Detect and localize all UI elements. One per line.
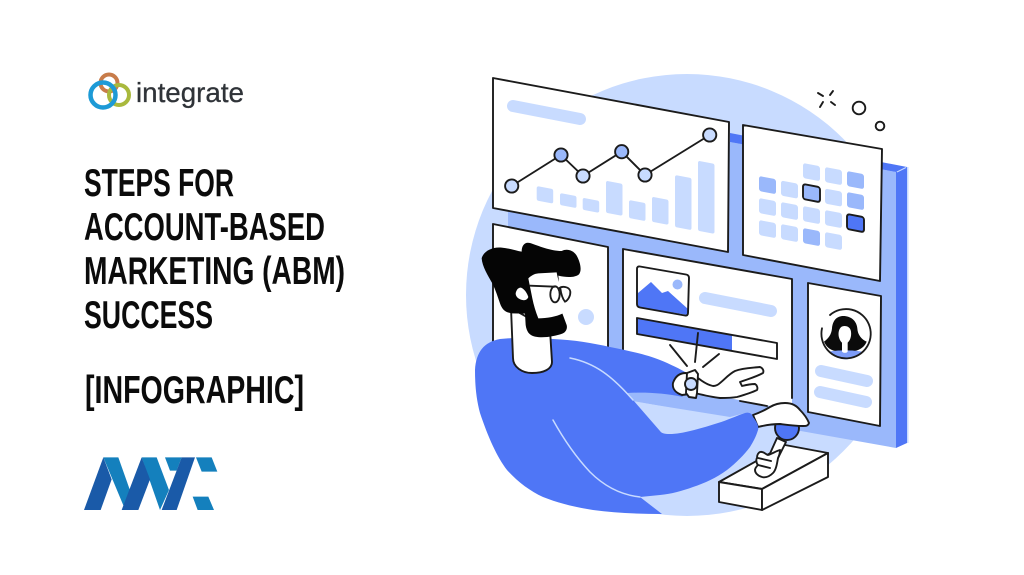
background circle: [466, 74, 908, 516]
person torso and arm: [475, 338, 758, 514]
title: MARKETING (ABM): [84, 250, 345, 293]
panel: lower left card: [493, 224, 608, 370]
logo: MTC: [84, 457, 217, 510]
sleeve fold lines: [553, 358, 640, 497]
progress bar: [637, 318, 777, 359]
sleeve cuff: [730, 413, 758, 440]
joystick box: [719, 445, 828, 510]
monitor screen: [508, 130, 908, 448]
subtitle: infographic tag: [INFOGRAPHIC]: [85, 369, 304, 412]
line chart: [505, 128, 716, 193]
panel: calendar grid: [743, 125, 882, 281]
avatar: [821, 309, 871, 359]
title: SUCCESS: [84, 294, 213, 337]
desk highlight: [637, 402, 753, 440]
person head: [482, 243, 581, 337]
illustration: analyst at dashboard: [466, 74, 908, 516]
panel: line chart: [493, 78, 729, 252]
glasses: [530, 286, 570, 302]
logo: integrate: integrate: [136, 77, 244, 108]
person neck: [511, 308, 552, 373]
logo: integrate: [90, 74, 244, 108]
panel: profile card: [808, 283, 881, 426]
emphasis ticks: [670, 333, 719, 367]
bar chart: [537, 161, 714, 234]
pointing hand and watch: [673, 367, 763, 398]
image thumbnail: [637, 266, 689, 316]
title: [84, 162, 345, 337]
sparkle decoration: [818, 91, 884, 130]
title: STEPS FOR: [84, 162, 234, 205]
title: ACCOUNT-BASED: [84, 206, 325, 249]
joystick stick and knob: [755, 416, 799, 477]
hand on joystick: [753, 403, 809, 427]
panel: center media card: [623, 249, 792, 410]
